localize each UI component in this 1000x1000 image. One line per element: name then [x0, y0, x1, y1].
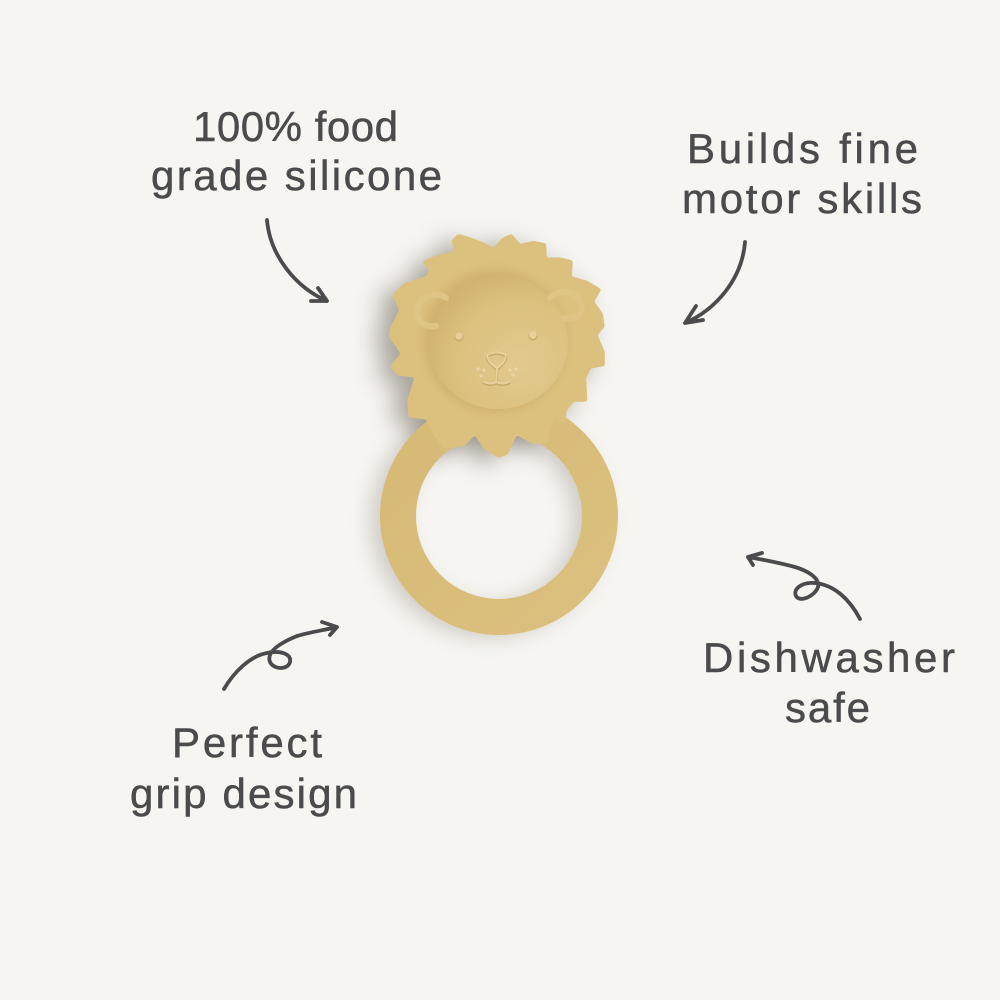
nose and mouth	[484, 352, 509, 384]
label text	[151, 103, 442, 199]
arrow	[224, 622, 337, 689]
left eye	[454, 332, 464, 342]
label text: 100% food	[193, 103, 398, 150]
arrow	[267, 220, 327, 301]
callout: fine motor skills	[682, 125, 922, 323]
label text	[682, 125, 922, 222]
teether ring	[398, 415, 600, 617]
callout: dishwasher safe	[703, 553, 955, 731]
label text: Dishwasher	[703, 634, 955, 681]
label text: motor skills	[682, 175, 922, 222]
product: lion teether	[375, 234, 605, 621]
lion mane	[389, 234, 605, 458]
whisker dots	[476, 367, 518, 378]
label text: Perfect	[172, 719, 322, 766]
right eye	[528, 331, 538, 340]
arrow	[748, 553, 860, 619]
callout: food grade silicone	[151, 103, 442, 301]
left ear	[417, 294, 446, 326]
label text: grade silicone	[151, 152, 442, 199]
label text	[130, 719, 357, 817]
callout: perfect grip design	[130, 622, 357, 817]
label text: safe	[785, 684, 870, 731]
label text	[703, 634, 955, 731]
arrow	[685, 242, 745, 323]
lion face	[424, 270, 568, 412]
teether shadow	[375, 240, 591, 621]
label text: Builds fine	[687, 125, 918, 172]
label text: grip design	[130, 770, 357, 817]
right ear	[550, 292, 582, 319]
